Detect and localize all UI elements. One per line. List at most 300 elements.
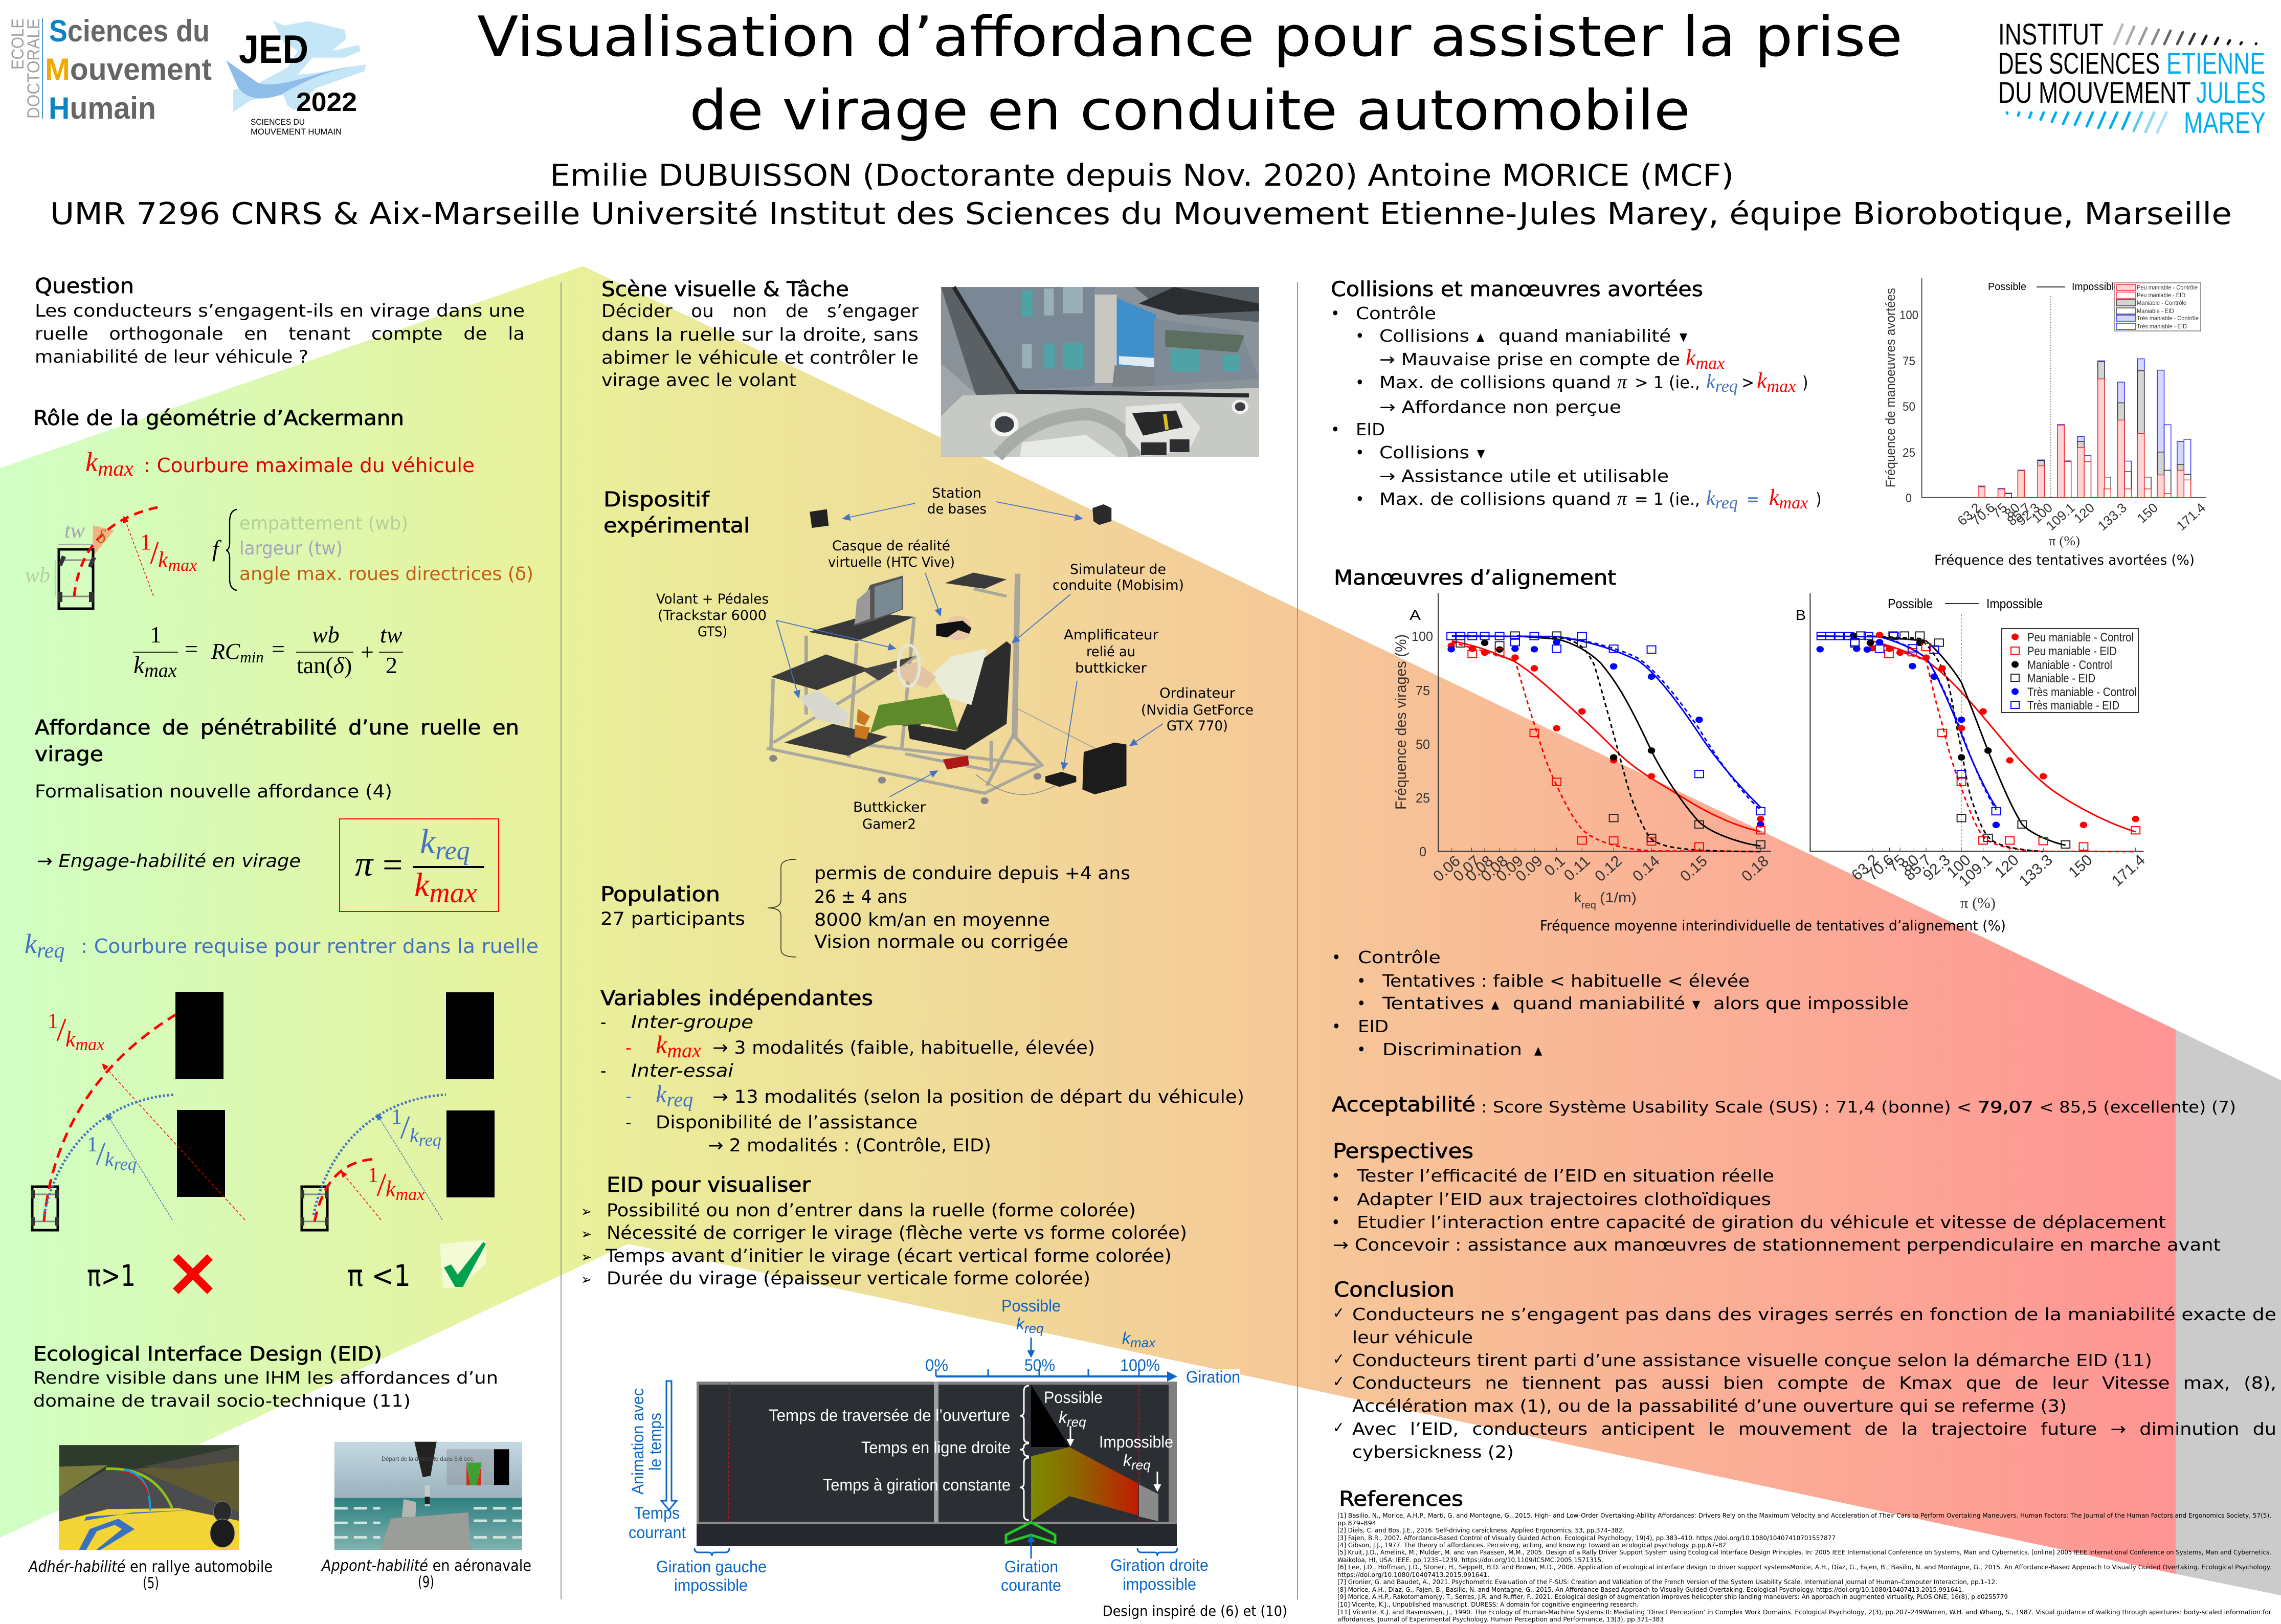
steering axis: 100% [1120,1356,1160,1374]
collisions and aborted manoeuvres text: k [1686,345,1696,370]
diagram: pi greater than 1: π>1 [87,1258,136,1293]
steering axis [925,1297,1240,1386]
bar chart legend [2115,283,2201,331]
display screen: Temps en ligne droite [861,1438,1011,1457]
rig annotations: Amplificateur [1064,627,1158,643]
panel: right column [1331,278,2276,1623]
rig annotations: Station [932,485,981,501]
collisions and aborted manoeuvres text: = [1747,489,1759,509]
line chart A: turn frequency vs kreq: 0.09 [1493,853,1527,885]
conclusion: cybersickness (2) [1352,1442,1514,1462]
line chart B: turn frequency vs pi: 75 [1885,852,1909,876]
references: [1] Basilio, N., Morice, A.H.P., Marti, G. and Montagne, G., 2015. High- and Low-Order Overtaking-Ability Affordances: Drivers Rely on the Maximum Velocity and Acceleration of Their Cars to Perform Overtaking Maneuvers. Human Factors: The Journal of the Human Factors and Ergonomics Society, 57(5), [1337,1511,2271,1519]
line chart A: turn frequency vs kreq [1393,593,1772,911]
bar chart: aborted attempts: 0 [1906,492,1912,505]
panel: left column [25,274,539,1592]
design credit: Design inspiré de (6) et (10) [1103,1603,1287,1619]
diagram: EID display [629,1297,1240,1594]
line chart A: turn frequency vs kreq: 0.1 [1541,853,1569,879]
function of wheelbase, width, steering angle: angle max. roues directrices (δ) [239,564,533,585]
bottom callouts: impossible [1123,1575,1196,1593]
diagram: pi greater than 1: k [105,1148,114,1171]
alignment results text [1332,947,1909,1059]
formula: minimum turning radius: tan(δ) [297,652,352,678]
collisions and aborted manoeuvres text: ) [1802,372,1808,392]
acceptability: Acceptabilité [1332,1093,1475,1117]
formula: minimum turning radius [133,621,403,681]
line chart B: turn frequency vs pi: 109.1 [1956,852,1996,889]
line chart B: turn frequency vs pi: 120 [1992,852,2022,881]
formula box: pi: π [355,844,374,884]
bar chart: aborted attempts: 25 [1903,446,1915,460]
authors and affiliation: UMR 7296 CNRS & Aix-Marseille Université Institut des Sciences du Mouvement Etienne-Jules Marey, équipe Biorobotique, Marseille [50,196,2232,231]
time axis [629,1381,686,1542]
line chart A: turn frequency vs kreq: A [1410,607,1421,623]
formula: minimum turning radius: k [133,652,144,679]
alignment results text: • [1332,1016,1341,1036]
EID description [33,1368,498,1411]
alignment results text: • [1332,947,1341,967]
diagram: pi greater than 1: k [65,1027,76,1052]
conclusion: Conducteurs ne tiennent pas aussi bien compte de Kmax que de leur Vitesse max, (8), [1352,1373,2276,1393]
collisions and aborted manoeuvres text: → Mauvaise prise en compte de [1379,349,1680,369]
references: [8] Morice, A.H., Diaz, G., Fajen, B., Basilio, N. and Montagne, G., 2015. An Affordance-Based Approach to Visually Guided Overtaking. Ecological Psychology. https://doi.org/10.1080/10407413.2015.991641. [1337,1586,1964,1593]
independent variables: k [656,1030,667,1059]
visual scene and task: virage avec le volant [601,370,796,391]
diagram: pi less than 1: k [410,1124,419,1147]
line chart A: turn frequency vs kreq: 0.09 [1512,853,1546,885]
bar chart: aborted attempts: Fréquence des tentatives avortées (%) [1934,552,2195,568]
image: rally driving EID [59,1445,239,1550]
bar chart legend: Très maniable - Contrôle [2137,315,2199,322]
independent variables: - [600,1061,606,1081]
logo: JED 2022: SCIENCES DU [251,117,305,127]
line chart B: turn frequency vs pi: 92.3 [1920,852,1954,884]
references: [4] Gibson, J.J., 1977. The theory of affordances. Perceiving, acting, and knowing: toward an ecological psychology. p.pp.67–82 [1337,1541,1726,1549]
bar chart legend: Très maniable - EID [2137,323,2187,330]
display screen: Possible [1044,1388,1103,1407]
EID to visualise: Nécessité de corriger le virage (flèche verte vs forme colorée) [607,1223,1187,1243]
line chart A: turn frequency vs kreq: 0.06 [1430,853,1464,885]
logo: JED 2022: 2022 [296,87,357,117]
display screen [697,1382,1177,1546]
bar chart: aborted attempts: 120 [2071,500,2097,526]
population: Vision normale ou corrigée [814,932,1068,952]
line chart B: turn frequency vs pi: π (%) [1960,895,1996,911]
conclusion: Avec l’EID, conducteurs anticipent le mouvement de la trajectoire future → diminution du [1352,1419,2276,1439]
logo: Institut des Sciences du Mouvement Etienne-Jules Marey: DU MOUVEMENT [1998,76,2191,109]
heading: Ecological Interface Design: Ecological Interface Design (EID) [33,1343,382,1365]
alignment results text: • [1357,971,1366,991]
bar chart: aborted attempts: 150 [2134,500,2161,526]
rig annotations: conduite (Mobisim) [1053,577,1184,593]
logo: Institut des Sciences du Mouvement Etienne-Jules Marey [1998,18,2266,140]
rig annotations: de bases [927,501,987,517]
line chart legend: Peu maniable - Control [2027,631,2134,644]
population: 27 participants [600,909,745,929]
formula: minimum turning radius: 2 [386,652,397,678]
bottom callouts [656,1536,1209,1594]
heading: experimental setup: expérimental [603,514,750,538]
bar chart: aborted attempts: Impossible [2072,281,2119,293]
line chart A: turn frequency vs kreq: 0.18 [1738,853,1772,885]
logo: JED 2022: JED [239,27,308,72]
line chart legend: Très maniable - EID [2027,699,2119,713]
display screen: Temps à giration constante [823,1476,1011,1494]
bar chart: aborted attempts: 75 [1988,500,2010,521]
steering axis: 0% [925,1356,948,1374]
line chart A: turn frequency vs kreq: k [1574,889,1582,905]
logo: école doctorale Sciences du Mouvement Humain: Mouvement [45,52,212,86]
line chart B: turn frequency vs pi: 70.6 [1864,852,1897,884]
formula: minimum turning radius: tw [380,621,402,648]
independent variables: → 13 modalités (selon la position de départ du véhicule) [712,1087,1244,1107]
references: Waikoloa, HI, USA: IEEE. pp.1235–1239. https://doi.org/10.1109/ICSMC.2005.1571315. [1337,1556,1603,1564]
caption: rally: (5) [143,1574,159,1592]
question [35,274,525,367]
bar chart: aborted attempts: Fréquence de manoeuvres avortées [1883,288,1898,487]
alignment results text: Contrôle [1358,947,1441,967]
diagram: pi less than 1: k [386,1176,396,1202]
formula box: pi: max [429,877,477,909]
line chart B: turn frequency vs pi [1796,593,2149,911]
bar chart: aborted attempts: 92.3 [2013,500,2043,528]
conclusion: Conducteurs ne s’engagent pas dans des virages serrés en fonction de la maniabilité exacte de [1352,1304,2276,1324]
bar chart: aborted attempts: 100 [1899,308,1918,322]
population: 26 ± 4 ans [814,887,907,907]
population [600,859,1130,957]
conclusion: ✓ [1333,1419,1345,1437]
rig annotations: Volant + Pédales [656,591,769,607]
collisions and aborted manoeuvres text: → Affordance non perçue [1379,397,1621,417]
collisions and aborted manoeuvres text: max [1779,494,1808,513]
caption: ship landing: (9) [418,1573,434,1591]
bottom callouts: courante [1001,1576,1061,1594]
collisions and aborted manoeuvres text: k [1706,486,1715,509]
collisions and aborted manoeuvres text: EID [1356,419,1385,439]
collisions and aborted manoeuvres text: k [1757,368,1767,393]
steering axis: 50% [1024,1356,1055,1374]
collisions and aborted manoeuvres text: quand maniabilité [1499,326,1671,346]
collisions and aborted manoeuvres text: > [1741,372,1754,392]
logo: école doctorale Sciences du Mouvement Humain: DOCTORALE [24,18,43,119]
line chart B: turn frequency vs pi: 85.7 [1901,852,1935,884]
kreq definition: : Courbure requise pour rentrer dans la ruelle [81,935,539,958]
caption: ship landing: Appont-habilité en aéronavale [321,1557,531,1575]
perspectives: • [1331,1189,1340,1209]
rig annotations: GTS) [698,624,727,640]
references: [6] Lee, J.D., Hoffman, J.D., Stoner, H., Seppelt, B.D. and Brown, M.D., 2006. Application of ecological interface design to driver support systemsMorice, A.H., Diaz, G., Fajen, B., Basilio, N. and Montagne, G., 2015. An Affordance-Based Approach to Visually Guided Overtaking. Ecological Psychology. [1337,1563,2271,1571]
line chart A: turn frequency vs kreq: 25 [1416,790,1430,806]
perspectives: • [1331,1212,1340,1232]
line chart A: turn frequency vs kreq: 0.07 [1450,853,1484,885]
collisions and aborted manoeuvres text: req [1715,494,1738,513]
formula box: pi [340,819,499,911]
bar chart legend: Maniable - EID [2137,307,2174,315]
collisions and aborted manoeuvres text: ▼ [1680,331,1688,344]
EID to visualise: ➢ [581,1249,592,1265]
collisions and aborted manoeuvres text: Contrôle [1356,303,1436,323]
alignment results text: Tentatives : faible < habituelle < élevée [1382,971,1750,991]
references: https://doi.org/10.1080/10407413.2015.991641. [1337,1571,1489,1578]
bottom callouts: impossible [674,1576,748,1594]
kmax definition [85,447,475,481]
alignment results text: EID [1358,1016,1389,1036]
line chart A: turn frequency vs kreq: req [1581,900,1596,911]
question: Question [35,274,134,298]
rig annotations: Gamer2 [862,816,916,832]
perspectives: Perspectives [1333,1140,1473,1163]
formula: minimum turning radius: RC [211,639,240,664]
acceptability [1332,1093,2236,1117]
rig annotations [656,485,1254,832]
line chart legend: Maniable - EID [2027,672,2095,685]
bottom callouts: Giration gauche [656,1558,767,1576]
bar chart: aborted attempts: 85.7 [2004,500,2033,528]
title: de virage en conduite automobile [689,79,1690,143]
collisions and aborted manoeuvres text: = 1 (ie., [1635,489,1700,509]
bar chart legend: Maniable - Contrôle [2137,299,2186,306]
panel: middle column [581,278,1287,1619]
perspectives [1331,1140,2221,1255]
perspectives: • [1331,1166,1340,1186]
caption: ship landing [321,1557,531,1591]
steering axis: Possible [1001,1297,1061,1315]
function of wheelbase, width, steering angle [212,509,533,590]
logo: école doctorale Sciences du Mouvement Humain: Humain [49,91,156,125]
car geometry diagram: wb [25,564,50,587]
alignment results text: • [1357,1039,1366,1059]
alignment results text: quand maniabilité [1513,993,1685,1013]
rig annotations: GTX 770) [1167,718,1228,734]
formula: minimum turning radius: 1 [150,621,162,648]
collisions and aborted manoeuvres text: ▲ [1477,331,1485,344]
bar chart legend: Peu maniable - Contrôle [2137,284,2198,291]
diagram: pi less than 1: π <1 [347,1258,411,1293]
EID to visualise: Durée du virage (épaisseur verticale forme colorée) [607,1269,1090,1289]
collisions and aborted manoeuvres text [1331,278,1822,513]
collisions and aborted manoeuvres text: max [1696,354,1725,373]
bar chart: aborted attempts: 80 [2001,500,2023,521]
text inside helicopter image: Départ de la descente dans 6.6 sec. [382,1455,475,1462]
conclusion: Conducteurs tirent parti d’une assistance visuelle conçue selon la démarche EID (11) [1352,1350,2152,1370]
references: [11] Vicente, K.J. and Rasmussen, J., 1990. The Ecology of Human-Machine Systems II: Mediating ‘Direct Perception’ in Complex Work Domains. Ecological Psychology, 2(3), pp.207–249Warren, W.H. and Whang, S., 1987. Visual guidance of walking through apertures: body-scaled information for [1337,1608,2271,1616]
references: [5] Kruit, J.D., Amelink, M., Mulder, M. and van Paassen, M.M., 2005. Design of a Rally Driver Support System using Ecological Interface Design Principles. In: 2005 IEEE International Conference on Systems, Man and Cybernetics. [online] 2005 IEEE International Conference on Systems, Man and Cybernetics. [1337,1548,2271,1556]
formula box: pi: k [414,866,429,904]
conclusion: ✓ [1333,1373,1345,1391]
line chart A: turn frequency vs kreq: 75 [1416,683,1430,698]
conclusion: ✓ [1333,1304,1345,1322]
EID description: domaine de travail socio-technique (11) [33,1391,411,1411]
line chart A: turn frequency vs kreq: 50 [1416,737,1430,752]
collisions and aborted manoeuvres text: max [1767,377,1796,396]
line chart B: turn frequency vs pi: B [1796,607,1806,623]
caption: rally: Adhér-habilité en rallye automobile [28,1558,273,1576]
visual scene and task: dans la ruelle sur la droite, sans [601,325,919,345]
title: Visualisation d’affordance pour assister la prise [477,5,1903,69]
independent variables: k [656,1081,666,1108]
question: maniabilité de leur véhicule ? [35,347,308,367]
conclusion: leur véhicule [1352,1327,1473,1347]
independent variables [600,987,1244,1156]
bar chart: aborted attempts: 171.4 [2174,500,2208,533]
formula: minimum turning radius: + [361,639,374,665]
bar chart: aborted attempts: π (%) [2049,533,2080,548]
line chart A: turn frequency vs kreq: 100 [1412,629,1433,644]
bar chart legend: Peu maniable - EID [2137,292,2185,299]
perspectives: Etudier l’interaction entre capacité de giration du véhicule et vitesse de déplacement [1357,1212,2166,1232]
line chart A: turn frequency vs kreq: 0 [1419,844,1426,859]
independent variables: req [666,1088,693,1111]
authors and affiliation: Emilie DUBUISSON (Doctorante depuis Nov. 2020) Antoine MORICE (MCF) [550,158,1734,193]
acceptability: < 85,5 (excellente) (7) [2039,1098,2236,1117]
display screen: Temps de traversée de l’ouverture [769,1406,1010,1425]
alignment results text: • [1357,993,1366,1013]
EID to visualise [581,1173,1187,1289]
diagram: pi less than 1: 1 [368,1164,378,1187]
steering axis: Giration [1186,1368,1240,1386]
diagram: pi greater than 1: 1 [87,1133,98,1156]
independent variables: Variables indépendantes [600,987,873,1010]
references: [7] Gronier, G. and Baudet, A., 2021. Psychometric Evaluation of the F-SUS: Creation and Validation of the French Version of the System Usability Scale. International Journal of Human–Computer Interaction, pp.1–12. [1337,1578,1997,1586]
heading: experimental setup: Dispositif [603,488,710,511]
formula box: pi: req [435,836,470,865]
acceptability: : Score Système Usability Scale (SUS) : 71,4 (bonne) < [1481,1098,1972,1117]
alignment results text: ▲ [1491,998,1500,1011]
line chart A: turn frequency vs kreq: (1/m) [1600,889,1637,905]
references: References [1339,1487,1463,1511]
visual scene and task: abimer le véhicule et contrôler le [601,348,919,368]
line chart legend [2002,629,2138,713]
independent variables: - [625,1113,631,1133]
line chart B: turn frequency vs pi: 63.2 [1848,852,1882,884]
steering axis: max [1130,1335,1156,1350]
bar chart: aborted attempts: 75 [1903,354,1915,368]
collisions and aborted manoeuvres text: π [1617,371,1627,393]
independent variables: - [625,1038,631,1058]
rig annotations: buttkicker [1075,660,1147,676]
diagram: driving simulator rig [767,504,1127,804]
caption: rally [28,1558,273,1592]
line chart legend: Maniable - Control [2027,658,2112,672]
logo: JED 2022 [226,20,366,137]
formula: minimum turning radius: max [144,660,177,681]
collisions and aborted manoeuvres text: req [1715,377,1738,396]
alignment results text: ▲ [1534,1044,1542,1057]
bar chart: aborted attempts: 63.2 [1954,500,1984,528]
alignment results text: ▼ [1692,998,1701,1011]
formalisation text: Formalisation nouvelle affordance (4) [35,782,392,802]
display screen: k [1059,1408,1067,1427]
independent variables: → 3 modalités (faible, habituelle, élevée) [712,1038,1095,1058]
visual scene and task: Décider ou non de s’engager [601,301,919,322]
EID to visualise: Possibilité ou non d’entrer dans la ruelle (forme colorée) [607,1200,1136,1221]
independent variables: Disponibilité de l’assistance [656,1113,918,1133]
car geometry diagram: max [168,556,197,575]
line chart A: turn frequency vs kreq: Fréquence des virages (%) [1393,634,1410,810]
visual scene and task: Scène visuelle & Tâche [601,278,849,301]
bar chart: aborted attempts: Possible [1988,281,2026,293]
heading: affordance: Affordance de pénétrabilité d’une ruelle en [35,716,519,740]
question: Les conducteurs s’engagent-ils en virage dans une [35,301,525,321]
acceptability: 79,07 [1978,1098,2033,1117]
collisions and aborted manoeuvres text: k [1706,370,1715,393]
conclusion [1333,1278,2276,1462]
heading: experimental setup [603,488,750,538]
diagram: pi less than 1: max [396,1185,424,1204]
collisions and aborted manoeuvres text: π [1617,488,1627,509]
display screen: req [1131,1457,1151,1473]
logo: Institut des Sciences du Mouvement Etienne-Jules Marey: INSTITUT [1998,18,2104,51]
independent variables: Inter-essai [631,1061,733,1081]
line chart caption: Fréquence moyenne interindividuelle de tentatives d’alignement (%) [1540,917,2006,934]
car geometry diagram: δ [97,526,106,547]
bar chart: aborted attempts: 109.1 [2043,500,2078,533]
conclusion: Accélération max (1), ou de la passabilité d’une ouverture qui se referme (3) [1352,1396,2067,1416]
logo: Institut des Sciences du Mouvement Etienne-Jules Marey: DES SCIENCES [1998,47,2160,80]
formula: minimum turning radius: = [272,636,285,662]
line chart B: turn frequency vs pi: Impossible [1986,596,2043,611]
diagram: pi greater than 1: 1 [48,1010,58,1033]
question: ruelle orthogonale en tenant compte de la [35,324,525,344]
steering axis: k [1016,1315,1024,1333]
function of wheelbase, width, steering angle: largeur (tw) [239,538,343,559]
bottom callouts: Giration [1004,1558,1058,1576]
references: pp.879–894 [1337,1519,1376,1527]
references [1337,1487,2271,1623]
references: [3] Fajen, B.R., 2007. Affordance-Based Control of Visually Guided Action. Ecological Psychology, 19(4), pp.383–410. https://doi.org/10.1080/10407410701557877 [1337,1534,1836,1542]
kreq definition [25,928,539,963]
rig annotations: (Nvidia GetForce [1141,702,1254,718]
kmax definition: max [98,457,133,481]
visual scene and task [601,278,919,391]
line chart A: turn frequency vs kreq: 0.08 [1463,853,1496,885]
perspectives: Tester l’efficacité de l’EID en situation réelle [1356,1166,1774,1186]
EID to visualise: ➢ [581,1226,592,1242]
references: [2] Diels, C. and Bos, J.E., 2016. Self-driving carsickness. Applied Ergonomics, 53, pp.374–382. [1337,1526,1624,1534]
rig annotations: virtuelle (HTC Vive) [828,554,955,570]
kreq definition: k [25,928,37,959]
references: [9] Morice, A.H.P., Rakotomamonjy, T., Serres, J.R. and Ruffier, F., 2021. Ecological design of augmentation improves helicopter ship landing maneuvers: An approach in augmented virtuality. PLOS ONE, 16(8), p.e0255779 [1337,1593,2008,1600]
time axis: courrant [629,1523,686,1542]
line chart A: turn frequency vs kreq: 0.12 [1592,853,1625,885]
population: 8000 km/an en moyenne [814,910,1050,930]
car geometry diagram [25,507,197,609]
bar chart: aborted attempts: 133.3 [2095,500,2130,533]
logo: école doctorale Sciences du Mouvement Humain: ECOLE [8,18,28,70]
heading: affordance [35,716,519,766]
display screen: req [1067,1414,1086,1430]
diagram: pi less than 1: req [419,1131,441,1150]
line chart B: turn frequency vs pi: 171.4 [2109,852,2149,889]
collisions and aborted manoeuvres text: • [1331,419,1340,439]
alignment results text: Tentatives [1382,993,1484,1013]
heading: alignment manoeuvres: Manœuvres d’alignement [1334,566,1616,590]
steering axis: req [1024,1321,1044,1336]
line chart B: turn frequency vs pi: 133.3 [2016,852,2056,889]
time axis: Animation avec [629,1388,647,1495]
steering axis: k [1122,1329,1130,1347]
line chart B: turn frequency vs pi: Possible [1888,596,1933,611]
line chart B: turn frequency vs pi: 80 [1898,852,1922,876]
line chart A: turn frequency vs kreq: 0.14 [1629,853,1663,885]
line chart A: turn frequency vs kreq: 0.08 [1478,853,1511,885]
collisions and aborted manoeuvres text: • [1331,303,1340,323]
alignment results text: Discrimination [1382,1039,1522,1059]
diagram: pi greater than 1: req [114,1155,137,1174]
logo: école doctorale Sciences du Mouvement Humain [8,14,212,125]
car geometry diagram: k [158,547,168,572]
